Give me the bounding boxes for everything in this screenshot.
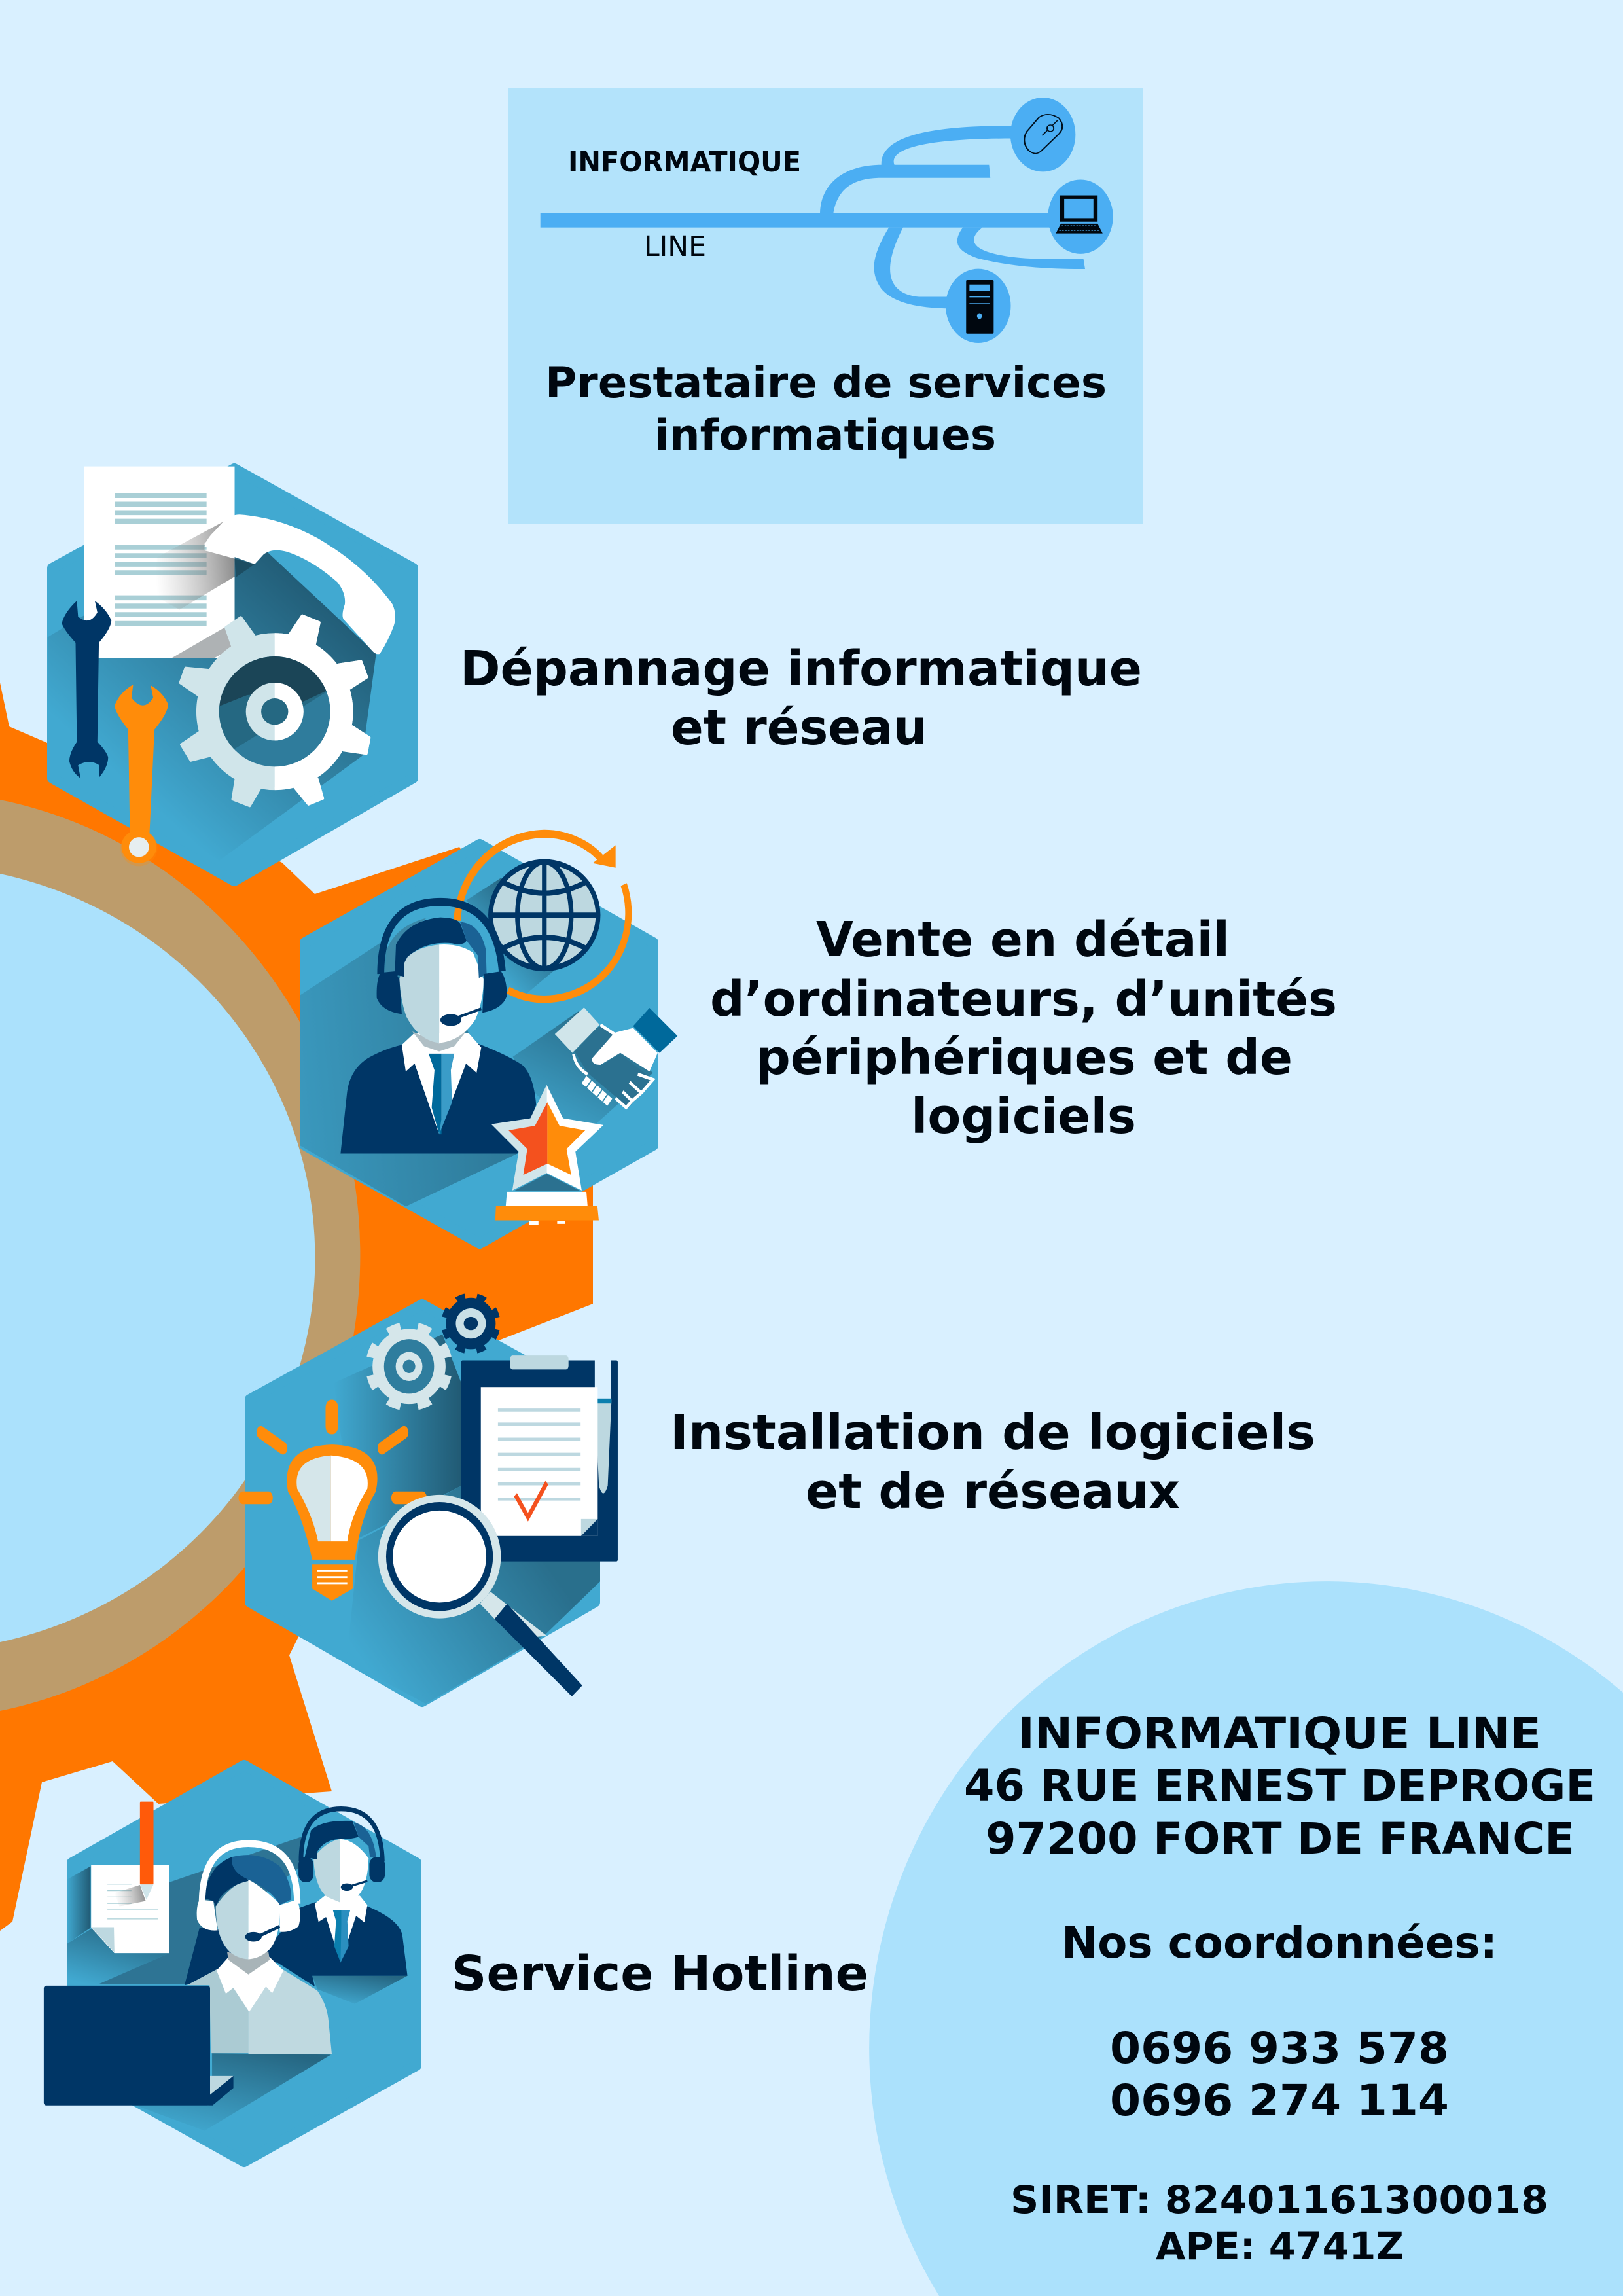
hexagon [52,469,413,881]
icon: handshake [555,1007,677,1107]
tagline: Prestataire de services [545,359,1107,408]
gear teeth: orange [0,683,593,1931]
heading: installation: Installation de logiciels [670,1405,1315,1461]
heading: depannage: Dépannage informatique [460,641,1142,697]
logo main line [541,213,1054,228]
phone numbers: 0696 274 114 [1110,2075,1449,2126]
logo wordmark: LINE: LINE [644,230,706,263]
icon: mouse [1010,98,1075,171]
heading: vente [710,912,1337,1145]
panel: vente icon [298,834,677,1244]
icon: star award [491,1085,603,1225]
hexagon [305,844,653,1244]
icon: laptop [44,1986,234,2106]
icon: note with pencil [91,1802,169,1953]
company address [964,1708,1596,1864]
gear centre: light blue [0,874,315,1642]
icon: magnifying glass [378,1495,582,1696]
heading: vente: Vente en détail [816,912,1230,968]
heading: vente: logiciels [911,1088,1136,1145]
panel: installation icon [243,1291,618,1704]
logo mark [541,98,1113,343]
gear graphic [0,683,593,1931]
icon: male agent [185,1809,408,1986]
document [84,467,235,658]
orange rotation arrow [457,834,628,999]
company address: INFORMATIQUE LINE [1018,1708,1541,1759]
icon: female agent [187,1844,332,2054]
logo wordmark: INFORMATIQUE: INFORMATIQUE [568,146,801,179]
icon: clipboard [461,1355,618,1562]
icon: orange wrench [115,685,168,866]
panel: logo [508,88,1143,524]
phone numbers: 0696 933 578 [1110,2023,1449,2073]
icon: globe [491,862,598,969]
heading: installation [670,1405,1315,1520]
hexagon [250,1304,595,1702]
long shadow [47,552,376,848]
coordinates heading: Nos coordonnées: [1061,1918,1497,1968]
heading: vente: périphériques et de [756,1030,1293,1086]
heading: installation: et de réseaux [806,1463,1180,1520]
long shadows [67,1837,408,2131]
icon: computer tower [946,269,1010,343]
phone numbers [1110,2023,1449,2126]
icon: gear [180,616,369,806]
icon: laptop [1048,179,1113,254]
heading: depannage [460,641,1142,756]
icon: navy gear [440,1291,501,1355]
icon: light bulb [243,1400,422,1601]
company address: 97200 FORT DE FRANCE [986,1814,1575,1864]
hexagon [72,1765,416,2162]
panel: hotline icon [44,1765,416,2162]
panel: contact [869,1581,1623,2296]
legal numbers [1010,2178,1548,2269]
telephone handset [205,514,395,654]
tagline: informatiques [654,411,996,460]
long shadows [298,878,653,1208]
heading: depannage: et réseau [671,700,927,756]
company address: 46 RUE ERNEST DEPROGE [964,1761,1596,1811]
panel: depannage icon [48,467,413,881]
icon: agent with headset [340,902,536,1153]
heading: vente: d’ordinateurs, d’unités [710,971,1337,1028]
heading: hotline: Service Hotline [452,1946,868,2002]
logo branches [820,126,1085,308]
icon: light gear [364,1320,454,1413]
contact circle [869,1581,1623,2296]
legal numbers: APE: 4741Z [1156,2224,1404,2269]
long shadows [345,1334,600,1703]
legal numbers: SIRET: 82401161300018 [1010,2178,1548,2222]
icon: navy wrench [62,601,111,778]
gear ring: tan [0,800,360,1711]
tagline [545,359,1107,460]
